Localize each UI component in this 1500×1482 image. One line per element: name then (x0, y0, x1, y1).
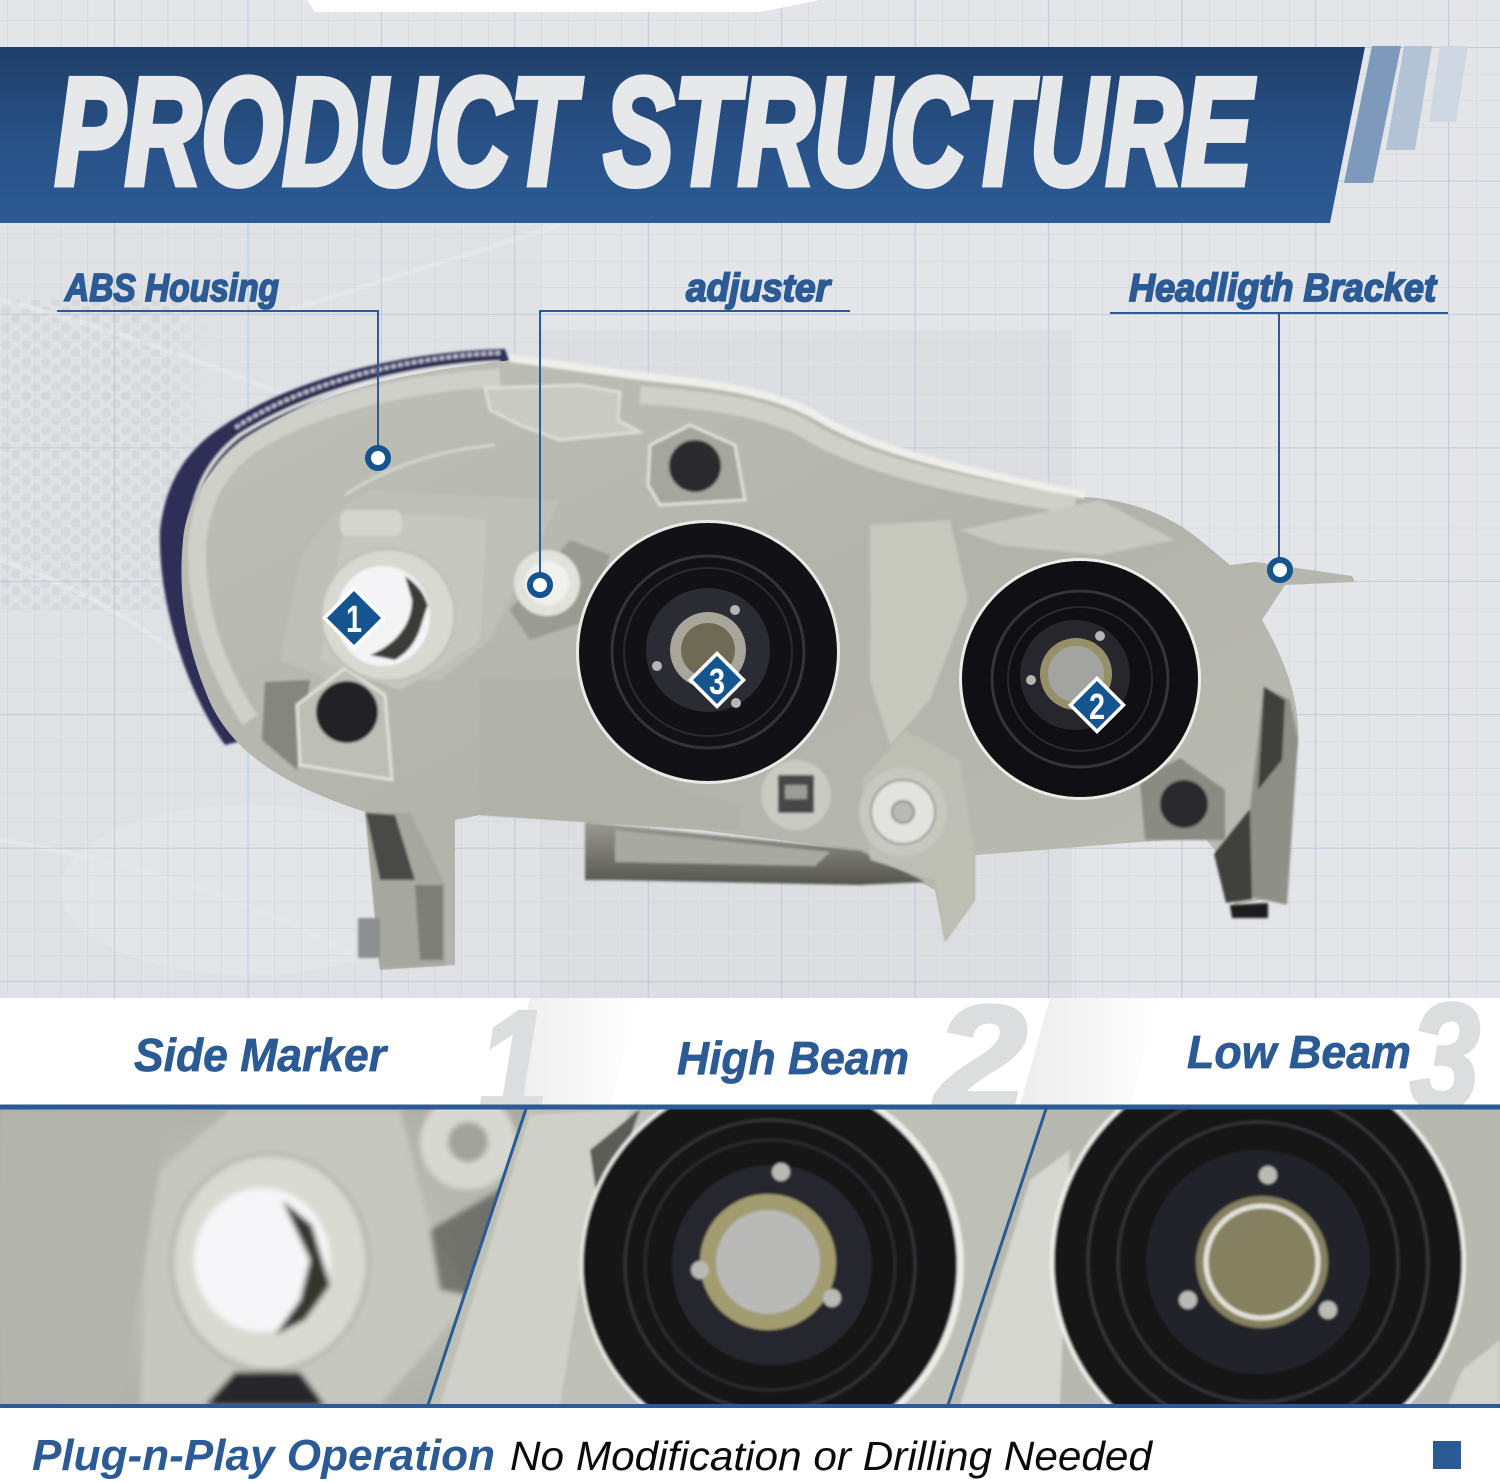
heading: high beam: High Beam (677, 1032, 909, 1084)
marker 2: 2 (1089, 686, 1105, 727)
callout: adjuster (530, 267, 850, 595)
footer square (1433, 1441, 1461, 1469)
footer (0, 1408, 1500, 1482)
big number 1: 1 (478, 979, 548, 1147)
lower body shading (480, 680, 740, 830)
headlight rear view illustration (160, 349, 1355, 970)
knob left (262, 668, 392, 780)
footer text: No Modification or Drilling Needed (510, 1433, 1153, 1479)
lower right bracket (1250, 687, 1298, 905)
upper clip (485, 385, 640, 440)
callout: headlight bracket (1110, 267, 1448, 580)
heading: low beam: Low Beam (1187, 1026, 1411, 1078)
housing body (181, 360, 1355, 970)
housing inner rim (197, 378, 500, 720)
callout: headlight bracket: Headligth Bracket (1129, 267, 1438, 310)
knob right (1140, 758, 1225, 840)
photo panel: high beam close-up (430, 1110, 1044, 1404)
side marker socket (321, 549, 455, 681)
top rim highlight (510, 358, 1085, 495)
big number 2: 2 (932, 974, 1027, 1142)
high beam socket (576, 520, 840, 784)
banner accent stripes (1344, 46, 1468, 183)
heading: side marker: Side Marker (134, 1029, 388, 1081)
label strip (0, 998, 1500, 1104)
knob top (648, 425, 745, 505)
photo panel: low beam close-up (950, 1110, 1500, 1404)
marker 3 (688, 651, 746, 709)
footer heading: Plug-n-Play Operation (32, 1431, 495, 1480)
callout: ABS Housing (57, 267, 388, 468)
inner arc step (345, 445, 495, 495)
photo panel: side marker close-up (0, 1094, 530, 1405)
title banner (0, 47, 1365, 223)
low beam socket (959, 558, 1201, 800)
channel under body (585, 822, 925, 885)
callout: ABS Housing: ABS Housing (64, 267, 279, 310)
side marker plate (320, 514, 487, 690)
marker 2 (1068, 676, 1126, 734)
lens edge (160, 349, 510, 745)
big number 3: 3 (1410, 972, 1480, 1140)
central rib (870, 520, 968, 745)
marker 1: 1 (346, 599, 362, 641)
lower adjuster bolt (859, 730, 975, 942)
marker 1 (322, 586, 386, 650)
blueprint grid background (0, 0, 1500, 1000)
adjuster screw (510, 540, 610, 640)
connector port (761, 760, 831, 830)
fixing bracket ribs (366, 813, 445, 968)
callout: adjuster: adjuster (686, 267, 832, 310)
panel frame lines (0, 1107, 1500, 1406)
marker 3: 3 (709, 661, 725, 702)
